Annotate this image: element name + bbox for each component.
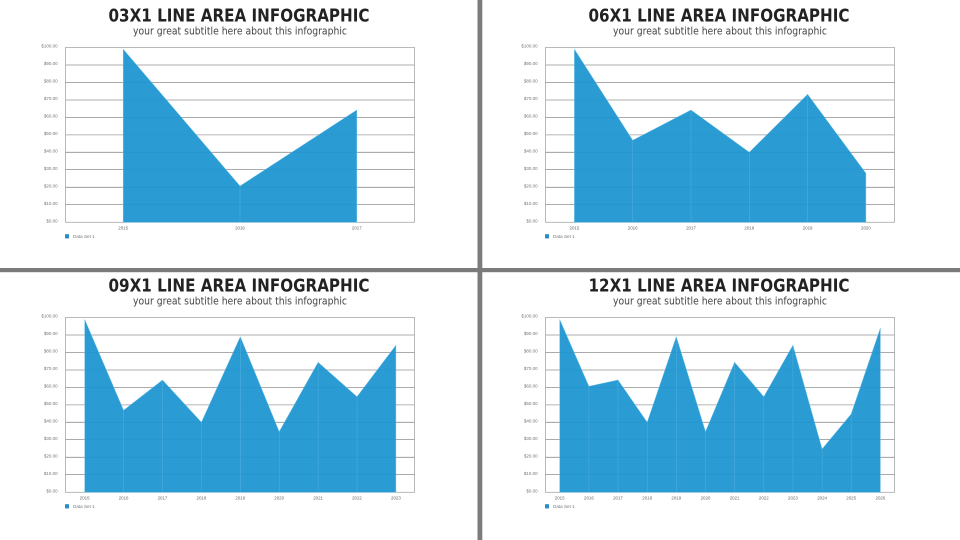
y axis labels: [521, 314, 538, 494]
y axis labels: $0.00: [526, 489, 538, 494]
y axis labels: $10.00: [524, 471, 538, 476]
area series: [123, 49, 357, 222]
y axis labels: $80.00: [524, 349, 538, 354]
x axis labels: 2015: [118, 226, 129, 231]
x axis labels: 2017: [158, 496, 168, 501]
y axis labels: $50.00: [44, 131, 58, 136]
x axis labels: 2019: [671, 496, 682, 501]
area series: [560, 320, 880, 492]
y axis labels: $30.00: [524, 166, 538, 171]
y axis labels: $50.00: [524, 131, 538, 136]
x axis labels: 2018: [642, 496, 653, 501]
x axis labels: 2016: [119, 496, 129, 501]
y axis labels: $0.00: [46, 489, 58, 494]
y axis labels: $80.00: [524, 79, 538, 84]
panel: 12X1 chart: [521, 277, 894, 509]
x axis labels: 2025: [846, 496, 857, 501]
y axis labels: $90.00: [44, 61, 58, 66]
title: 06X1 LINE AREA INFOGRAPHIC: [588, 7, 850, 27]
y axis labels: $100.00: [521, 314, 538, 319]
y axis labels: $70.00: [524, 366, 538, 371]
legend: Data Set 1: [553, 504, 575, 509]
y axis labels: $40.00: [524, 419, 538, 424]
legend: Data Set 1: [553, 234, 575, 239]
x axis labels: [80, 496, 401, 501]
x axis labels: 2018: [744, 226, 755, 231]
area series: [574, 49, 866, 222]
y axis labels: $70.00: [524, 96, 538, 101]
x axis labels: 2026: [876, 496, 886, 501]
y axis labels: $0.00: [46, 219, 58, 224]
y axis labels: $90.00: [524, 331, 538, 336]
y axis labels: $100.00: [41, 314, 58, 319]
x axis labels: 2022: [352, 496, 362, 501]
y axis labels: $60.00: [524, 114, 538, 119]
x axis labels: 2023: [391, 496, 401, 501]
x axis labels: 2015: [555, 496, 565, 501]
y axis labels: $70.00: [44, 96, 58, 101]
panel: 06X1 chart: [521, 7, 894, 239]
y axis labels: $40.00: [44, 149, 58, 154]
subtitle: your great subtitle here about this infographic: [133, 25, 347, 38]
y axis labels: $20.00: [524, 184, 538, 189]
y axis labels: $10.00: [44, 471, 58, 476]
gridlines and frame: [546, 47, 894, 222]
panel: 03X1 chart: [41, 7, 414, 239]
panel: 09X1 chart: [41, 277, 414, 509]
gridlines and frame: [546, 317, 894, 492]
y axis labels: [521, 44, 538, 224]
y axis labels: $30.00: [524, 436, 538, 441]
x axis labels: 2024: [817, 496, 828, 501]
legend: Data Set 1: [73, 234, 95, 239]
y axis labels: $0.00: [526, 219, 538, 224]
x axis labels: 2016: [628, 226, 638, 231]
x axis labels: 2023: [788, 496, 798, 501]
x axis labels: 2016: [235, 226, 245, 231]
y axis labels: $30.00: [44, 166, 58, 171]
x axis labels: 2021: [730, 496, 740, 501]
x axis labels: 2017: [686, 226, 696, 231]
y axis labels: $40.00: [44, 419, 58, 424]
x axis labels: 2016: [584, 496, 594, 501]
x axis labels: [570, 226, 871, 231]
x axis labels: 2018: [197, 496, 207, 501]
title: 12X1 LINE AREA INFOGRAPHIC: [588, 277, 850, 297]
x axis labels: 2017: [613, 496, 623, 501]
subtitle: your great subtitle here about this infographic: [613, 25, 827, 38]
y axis labels: $10.00: [44, 201, 58, 206]
x axis labels: [555, 496, 886, 501]
x axis labels: 2015: [570, 226, 580, 231]
y axis labels: $100.00: [521, 44, 538, 49]
y axis labels: $60.00: [44, 384, 58, 389]
x axis labels: 2015: [80, 496, 90, 501]
subtitle: your great subtitle here about this infographic: [613, 295, 827, 308]
x axis labels: 2020: [701, 496, 711, 501]
x axis labels: 2022: [759, 496, 769, 501]
y axis labels: $90.00: [44, 331, 58, 336]
y axis labels: [41, 44, 58, 224]
x axis labels: 2019: [803, 226, 813, 231]
y axis labels: $70.00: [44, 366, 58, 371]
y axis labels: $90.00: [524, 61, 538, 66]
y axis labels: $50.00: [44, 401, 58, 406]
y axis labels: $30.00: [44, 436, 58, 441]
x axis labels: 2020: [861, 226, 871, 231]
y axis labels: $50.00: [524, 401, 538, 406]
x axis labels: 2019: [235, 496, 246, 501]
y axis labels: $80.00: [44, 79, 58, 84]
x axis labels: [118, 226, 362, 231]
y axis labels: $100.00: [41, 44, 58, 49]
area series: [85, 320, 396, 492]
y axis labels: $20.00: [44, 454, 58, 459]
x axis labels: 2021: [313, 496, 324, 501]
y axis labels: $20.00: [44, 184, 58, 189]
gridlines and frame: [66, 47, 414, 222]
y axis labels: $10.00: [524, 201, 538, 206]
gridlines and frame: [66, 317, 414, 492]
y axis labels: $40.00: [524, 149, 538, 154]
x axis labels: 2020: [274, 496, 285, 501]
legend: Data Set 1: [73, 504, 95, 509]
title: 09X1 LINE AREA INFOGRAPHIC: [108, 277, 370, 297]
y axis labels: $80.00: [44, 349, 58, 354]
y axis labels: $60.00: [44, 114, 58, 119]
x axis labels: 2017: [352, 226, 362, 231]
title: 03X1 LINE AREA INFOGRAPHIC: [108, 7, 370, 27]
y axis labels: $20.00: [524, 454, 538, 459]
subtitle: your great subtitle here about this infographic: [133, 295, 347, 308]
y axis labels: $60.00: [524, 384, 538, 389]
y axis labels: [41, 314, 58, 494]
